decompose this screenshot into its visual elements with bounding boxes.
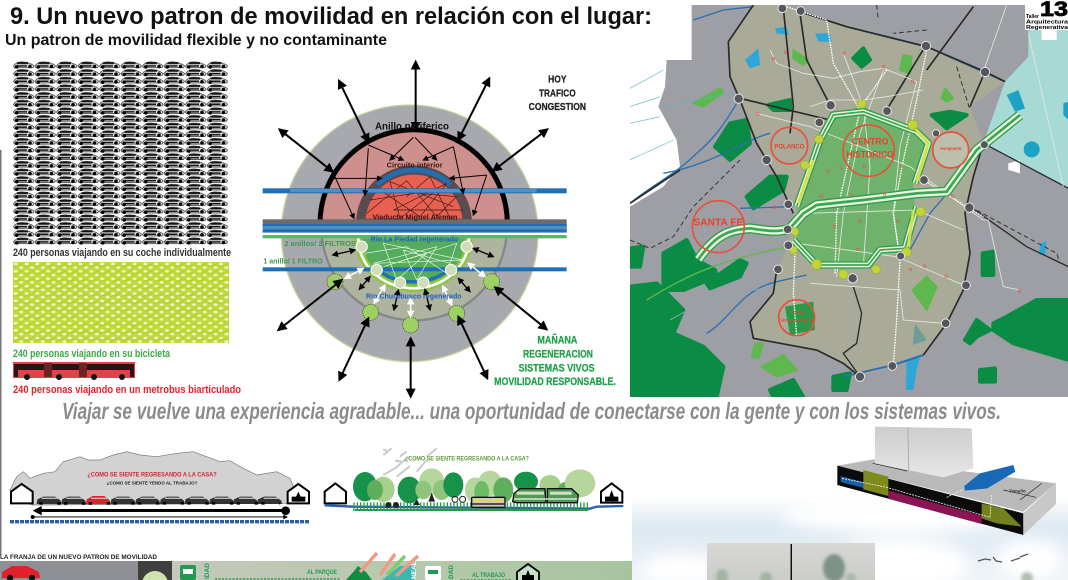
ring roads [630, 5, 1068, 377]
section front face [837, 466, 1023, 535]
green corridor [698, 112, 1020, 265]
district: Centro Historico [843, 125, 894, 176]
section top surface [837, 459, 1056, 512]
university campus [785, 302, 815, 335]
tomorrow caption: REGENERACION [523, 348, 593, 360]
title: 9. Un nuevo patron de movilidad en relación con el lugar: [10, 3, 652, 30]
map base land [630, 5, 1068, 397]
vertical label right: DAD [448, 565, 455, 579]
commute arrow [33, 506, 290, 515]
question green: ¿COMO SE SIENTE REGRESANDO A LA CASA? [405, 457, 529, 463]
diagram labels: Circuito interior [387, 162, 443, 169]
3D street section [837, 427, 1056, 535]
return line [31, 515, 288, 519]
white mobility web [365, 243, 463, 280]
red car [2, 566, 40, 580]
strip caption: LA FRANJA DE UN NUEVO PATRON DE MOVILIDAD [0, 554, 157, 561]
strip dark segment [138, 561, 172, 580]
thin inward arrows [333, 137, 487, 218]
al parque: AL PARQUE [307, 570, 337, 576]
rivers [630, 7, 1005, 377]
diagram labels: Rio La Piedad regenerado [371, 235, 459, 244]
today caption: CONGESTION [529, 102, 586, 113]
today: periferico half [320, 130, 507, 223]
district: Polanco: POLANCO [774, 144, 805, 150]
diagram labels: Anillo periferico [375, 121, 449, 132]
cyclists and walkers [385, 493, 466, 508]
outer territory circle [281, 105, 538, 362]
today caption: HOY [548, 75, 567, 86]
car label: 240 personas viajando en su coche individualmente [13, 247, 231, 259]
grass [353, 507, 590, 510]
olive filters [863, 470, 888, 496]
red station marks [757, 51, 1021, 292]
metrobus icon [13, 362, 135, 380]
logo: Taller 13: Arquitectura [1026, 20, 1068, 26]
buildings [875, 427, 973, 477]
magenta lane [888, 491, 982, 524]
logo: Taller 13: Taller [1026, 14, 1039, 20]
district: Centro Historico: CENTRO [852, 136, 888, 146]
small black arrows [333, 248, 493, 310]
car windows [42, 496, 280, 500]
diagram labels [263, 121, 462, 301]
blue train [964, 465, 1015, 491]
dimension marks [873, 463, 1042, 500]
district: east [933, 132, 969, 168]
today caption [529, 75, 586, 113]
lower regenerated ring [322, 233, 507, 320]
tangled traffic lines [367, 177, 463, 218]
gray triangle park [913, 323, 927, 345]
dotted section line [842, 478, 992, 517]
diagram labels: 2 anillos/ 2 FILTROS [284, 239, 356, 248]
al trabajo: AL TRABAJO [472, 573, 505, 579]
forest [346, 566, 372, 580]
birds gray [383, 448, 437, 477]
district: Santa Fe: SANTA FE [693, 218, 743, 229]
gray ring nodes [734, 4, 990, 381]
water bodies [745, 27, 1068, 390]
bus icon left [180, 565, 196, 580]
trees in photo [716, 554, 1033, 580]
black long arrows [278, 62, 547, 397]
blue road [10, 517, 310, 527]
panel: tomorrow's commute [325, 448, 623, 510]
tomorrow caption [494, 333, 616, 388]
district: east: Aeropuerto [940, 146, 961, 152]
logo notch [1042, 30, 1057, 40]
traffic jam [37, 496, 282, 504]
district: Ciudad Universitaria [779, 300, 815, 336]
left edge rule [0, 150, 2, 555]
yellow-green stations [789, 100, 925, 279]
filter nodes [356, 241, 472, 288]
tree photo [707, 543, 875, 580]
filter ring [358, 238, 469, 288]
house left [11, 484, 33, 503]
city land [728, 5, 1005, 377]
diagram labels: 1 anillo/ 1 FILTRO [263, 256, 323, 265]
dotted white routes [787, 7, 983, 365]
question red: ¿COMO SE SIENTE REGRESANDO A LA CASA? [87, 472, 217, 479]
district: Ciudad Universitaria: Ciudad [789, 310, 804, 316]
workplace right [288, 484, 309, 503]
bicycle grid [13, 262, 229, 343]
regenerated inner core [358, 238, 469, 288]
section label: Tamaño [1009, 489, 1026, 494]
tree canopy [353, 468, 595, 503]
white notch in lake [1008, 160, 1020, 173]
blue lane [841, 476, 865, 488]
bicycle label: 240 personas viajando en su bicicleta [13, 348, 171, 360]
lower blue line [263, 267, 567, 271]
panel: ring diagram [263, 62, 616, 397]
panel: people comparison [13, 61, 241, 396]
panel: today's commute [10, 452, 310, 522]
teal canal block [382, 566, 416, 580]
today caption: TRAFICO [539, 89, 576, 100]
district: Ciudad Universitaria: Universitaria [780, 317, 813, 323]
subtitle: Un patron de movilidad flexible y no contaminante [5, 32, 387, 49]
central road band [263, 219, 567, 233]
upper blue line [263, 188, 567, 193]
forests [630, 48, 1068, 397]
panel: mobility strip [0, 553, 632, 580]
vertical label left: IDAD [204, 563, 211, 579]
building divider [906, 427, 910, 470]
logo backing [1025, 5, 1068, 30]
central green district [793, 107, 927, 267]
green tram [513, 489, 578, 503]
photo divider pole [790, 544, 792, 580]
car grid [13, 61, 228, 245]
olive filter right [982, 503, 1022, 527]
workplace right [601, 483, 622, 503]
colored birds [360, 553, 418, 576]
diagram labels: Viaducto Miguel Aleman [372, 212, 458, 221]
pollution cloud [10, 452, 293, 505]
house left [325, 483, 346, 503]
birds [978, 554, 1028, 562]
metrobus label: 240 personas viajando en un metrobus biarticulado [13, 384, 241, 396]
today: inner circuit [361, 170, 467, 223]
lake region [983, 30, 1068, 188]
pale node [142, 571, 168, 580]
white street network [757, 5, 1063, 323]
blue arc on inner circuit [377, 170, 451, 185]
section right face [1023, 483, 1056, 535]
diagram labels: Rio Churubusco regenerado [366, 292, 462, 301]
green living nodes [327, 274, 500, 333]
tomorrow caption: MAÑANA [537, 333, 578, 346]
vertical label canal: NEAL [411, 561, 418, 579]
logo: Taller 13: Regenerativa [1026, 25, 1068, 31]
bus icon right [425, 566, 441, 580]
white arrows [345, 263, 485, 317]
dotted lane left [215, 578, 340, 580]
question black: ¿COMO SE SIENTE YENDO AL TRABAJO? [107, 481, 197, 486]
tomorrow caption: SISTEMAS VIVOS [519, 362, 595, 374]
district: Santa Fe [692, 201, 744, 253]
district: Centro Historico: HISTORICO [846, 150, 894, 160]
logo: Taller 13 [1026, 0, 1068, 31]
strip gray segment [0, 561, 138, 580]
panel: sky and render [632, 427, 1068, 580]
strip green segment [172, 561, 632, 580]
car wheels [39, 499, 280, 507]
tomorrow caption: MOVILIDAD RESPONSABLE. [494, 376, 616, 388]
dashed transit lines [630, 5, 1060, 263]
green bus [472, 497, 505, 507]
workplace icon [517, 564, 539, 580]
ground water [325, 505, 623, 509]
panel: city map [630, 4, 1068, 397]
district: Polanco [771, 127, 808, 164]
light green parks [693, 50, 953, 377]
clouds [640, 497, 1065, 580]
sky background [632, 460, 1068, 580]
dotted lane right [460, 579, 512, 580]
